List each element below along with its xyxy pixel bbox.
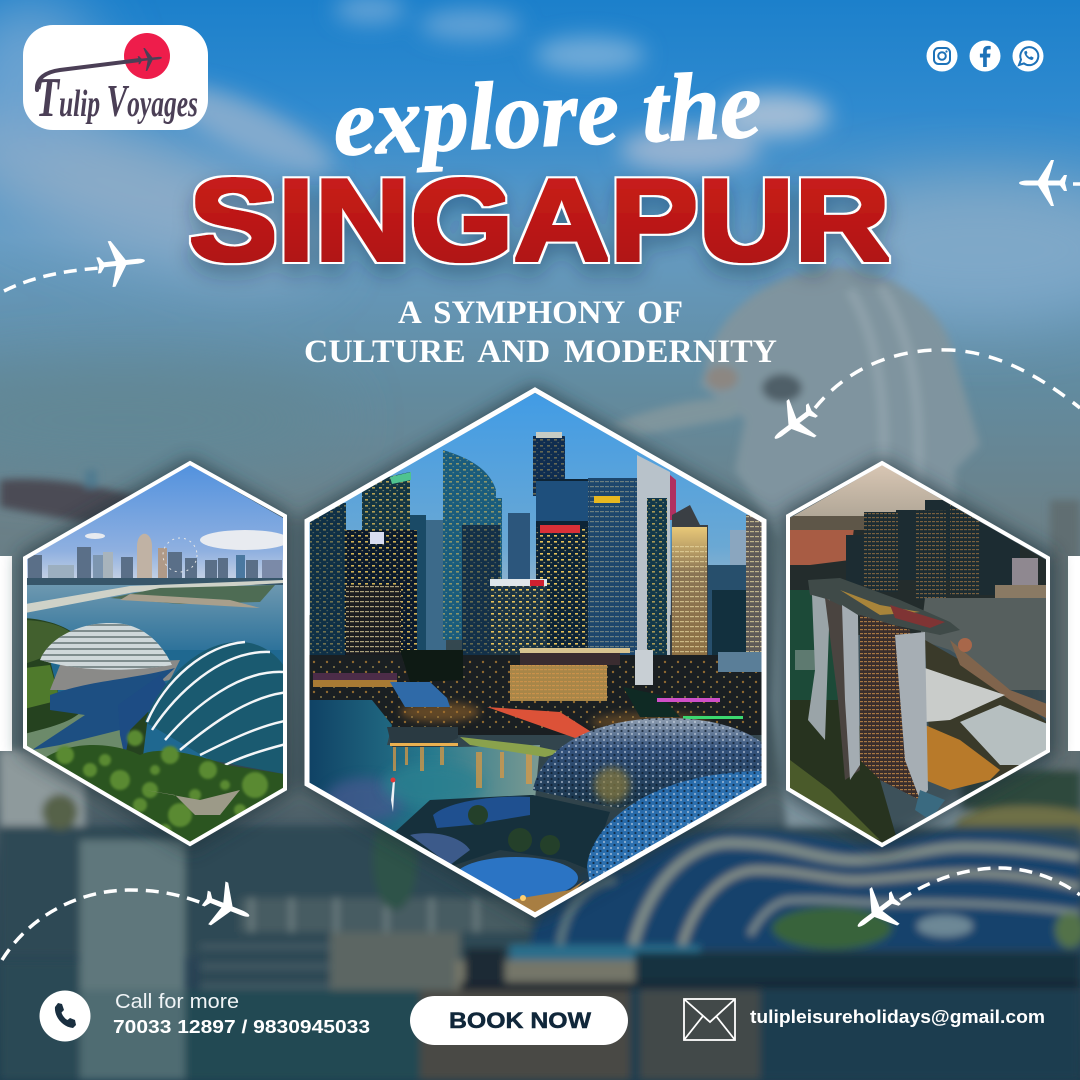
fountain [530,831,1080,950]
flight path right [761,350,1080,457]
photo hexagon: Marina Bay Sands [785,460,1055,860]
icon: envelope [684,999,735,1040]
book now button: BOOK NOW [449,1008,591,1033]
email address: tulipleisureholidays@gmail.com [750,1007,1045,1027]
book now button [410,996,628,1045]
basin and base [510,945,700,961]
flight path bottom left [2,877,258,960]
email contact [684,999,1045,1040]
photo hexagon: Gardens by the Bay [20,460,290,850]
hexagon shadows [20,385,1055,922]
title: SINGAPUR: SINGAPUR [189,155,890,285]
dark tree limb [0,479,190,530]
ground tones [0,750,85,828]
flight path top right [1019,160,1080,206]
subtitle: CULTURE AND MODERNITY [304,334,777,370]
social icons [926,40,1044,72]
icon: whatsapp [1012,40,1044,72]
merlion statue silhouette [700,268,985,850]
icon: instagram [926,40,958,72]
flight path bottom right [844,868,1080,945]
logo: plane [137,46,163,72]
icon: phone [40,990,90,1042]
logo: wordmark: Tulip Voyages [36,67,198,129]
subtitle [304,295,777,370]
logo: plane swoosh [37,60,140,90]
call label: Call for more [115,991,239,1013]
icon: facebook [970,40,1000,72]
logo badge [23,25,208,130]
logo: red circle [124,33,170,79]
flight path top left [4,238,147,291]
photo hexagon: Marina Bay skyline [300,385,770,920]
side tab right [1068,556,1080,751]
subtitle: A SYMPHONY OF [398,295,683,331]
phone contact [40,990,370,1042]
title: explore the: explore the [331,50,764,176]
phone numbers: 70033 12897 / 9830945033 [113,1017,370,1037]
side tab left [0,556,12,751]
greenery right [960,770,1080,810]
